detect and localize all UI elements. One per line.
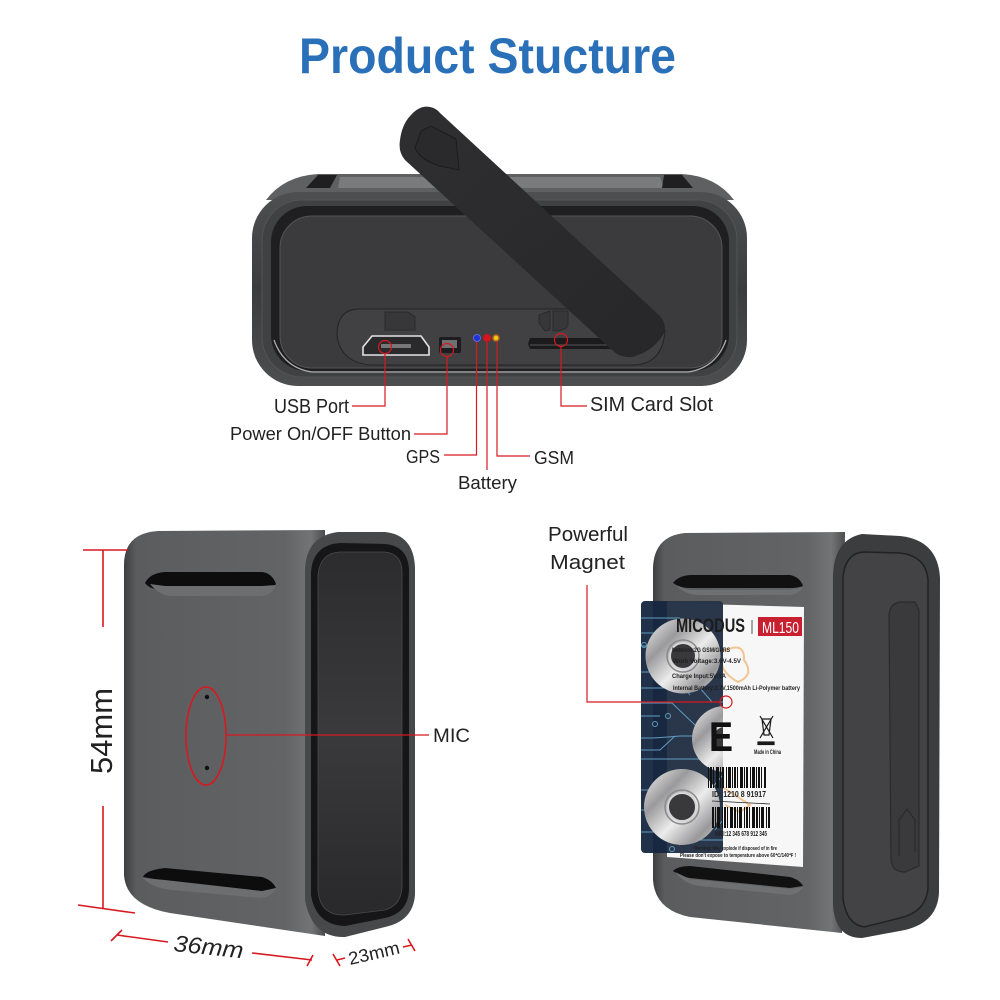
sticker text showing through overlay [672, 616, 800, 859]
top rear edge of device [266, 174, 734, 200]
magnet 3 [644, 769, 720, 845]
spec text: Network:2G GSM/GPRS [672, 647, 731, 654]
device: front left view [124, 530, 415, 937]
led: blue [474, 334, 480, 342]
dimension: depth [333, 939, 415, 966]
port bay [337, 309, 665, 365]
magnet 1 [646, 618, 720, 694]
callout: magnet [587, 585, 732, 708]
callout line: gsm [497, 342, 530, 456]
label: Powerful Magnet: Magnet [550, 552, 625, 574]
label: Powerful Magnet: Powerful [548, 524, 628, 546]
label: 36mm: 36mm [172, 930, 245, 963]
warning text [680, 846, 796, 859]
top vent slot [673, 575, 803, 595]
id number: ID: 1210 8 91917 [712, 790, 766, 799]
power button [439, 337, 461, 353]
label: Power On/OFF Button: Power On/OFF Button [230, 424, 411, 444]
device body [252, 192, 747, 386]
led: red [483, 334, 491, 342]
imei number: IMEI:12 345 678 912 345 [715, 831, 767, 838]
device: open rubber cover [400, 107, 665, 357]
bottom vent slot [673, 866, 803, 895]
made in china: Made in China [754, 750, 781, 756]
dimension: height [78, 550, 135, 913]
ce mark: E [709, 713, 733, 760]
barcode one [708, 767, 766, 788]
icon: sim symbol [539, 311, 568, 331]
orange watermark [722, 648, 750, 812]
back face [653, 532, 845, 933]
model badge divider [751, 620, 753, 634]
callout line: power button [414, 356, 447, 434]
magnet 2 [692, 706, 723, 772]
usb port [363, 336, 429, 355]
device: top view with open cover [252, 174, 747, 386]
sim slot [528, 338, 622, 349]
icon: usb symbol [385, 312, 415, 330]
side panel with cover [833, 534, 940, 938]
led: yellow [493, 335, 499, 341]
front face [124, 530, 325, 936]
device: back right view [653, 532, 940, 938]
product label sticker [667, 603, 804, 867]
bottom vent slot [143, 868, 276, 898]
callout line: battery [486, 342, 488, 470]
icon: crossed bin [758, 716, 774, 744]
label: SIM Card Slot: SIM Card Slot [590, 394, 713, 416]
top vent slot [145, 572, 276, 596]
dimension lines: left device [78, 550, 429, 966]
mic holes [205, 695, 209, 699]
label: GPS: GPS [406, 447, 440, 467]
callouts: top device [352, 334, 587, 470]
model badge [758, 617, 802, 637]
side rubber panel [305, 532, 415, 937]
dimension: width [111, 930, 313, 966]
circuit lines [641, 618, 723, 852]
brand: MICODUS [676, 616, 745, 637]
label: Battery: Battery [458, 473, 517, 493]
magnet overlay panel [641, 601, 723, 853]
spec text [672, 647, 800, 692]
label: 54mm: 54mm [84, 688, 119, 774]
label: GSM: GSM [534, 448, 574, 468]
label: Powerful Magnet [548, 524, 628, 574]
model badge: ML150 [762, 620, 799, 637]
warning text: Warning! May explode if disposed of in fire [694, 846, 777, 852]
spec text: Internal Battery:3.7V,1500mAh Li-Polymer battery [673, 685, 800, 692]
barcode two [712, 807, 770, 828]
label: MIC: MIC [433, 726, 470, 747]
spec text: Work Voltage:3.6V-4.5V [673, 658, 742, 665]
label: 23mm: 23mm [346, 938, 402, 969]
label: USB Port: USB Port [274, 396, 349, 418]
title: Product Stucture [299, 28, 676, 84]
spec text: Charge Input:5V/1A [672, 673, 726, 680]
callout line: sim slot [561, 346, 587, 406]
callout line: gps [444, 342, 476, 455]
sim cover outline [889, 602, 919, 872]
callout line: usb port [352, 353, 385, 406]
cover tab mark [899, 809, 915, 856]
warning text: Please don't expose to temperature above 60℃/140℉ ! [680, 852, 796, 859]
callout: mic [186, 687, 226, 785]
